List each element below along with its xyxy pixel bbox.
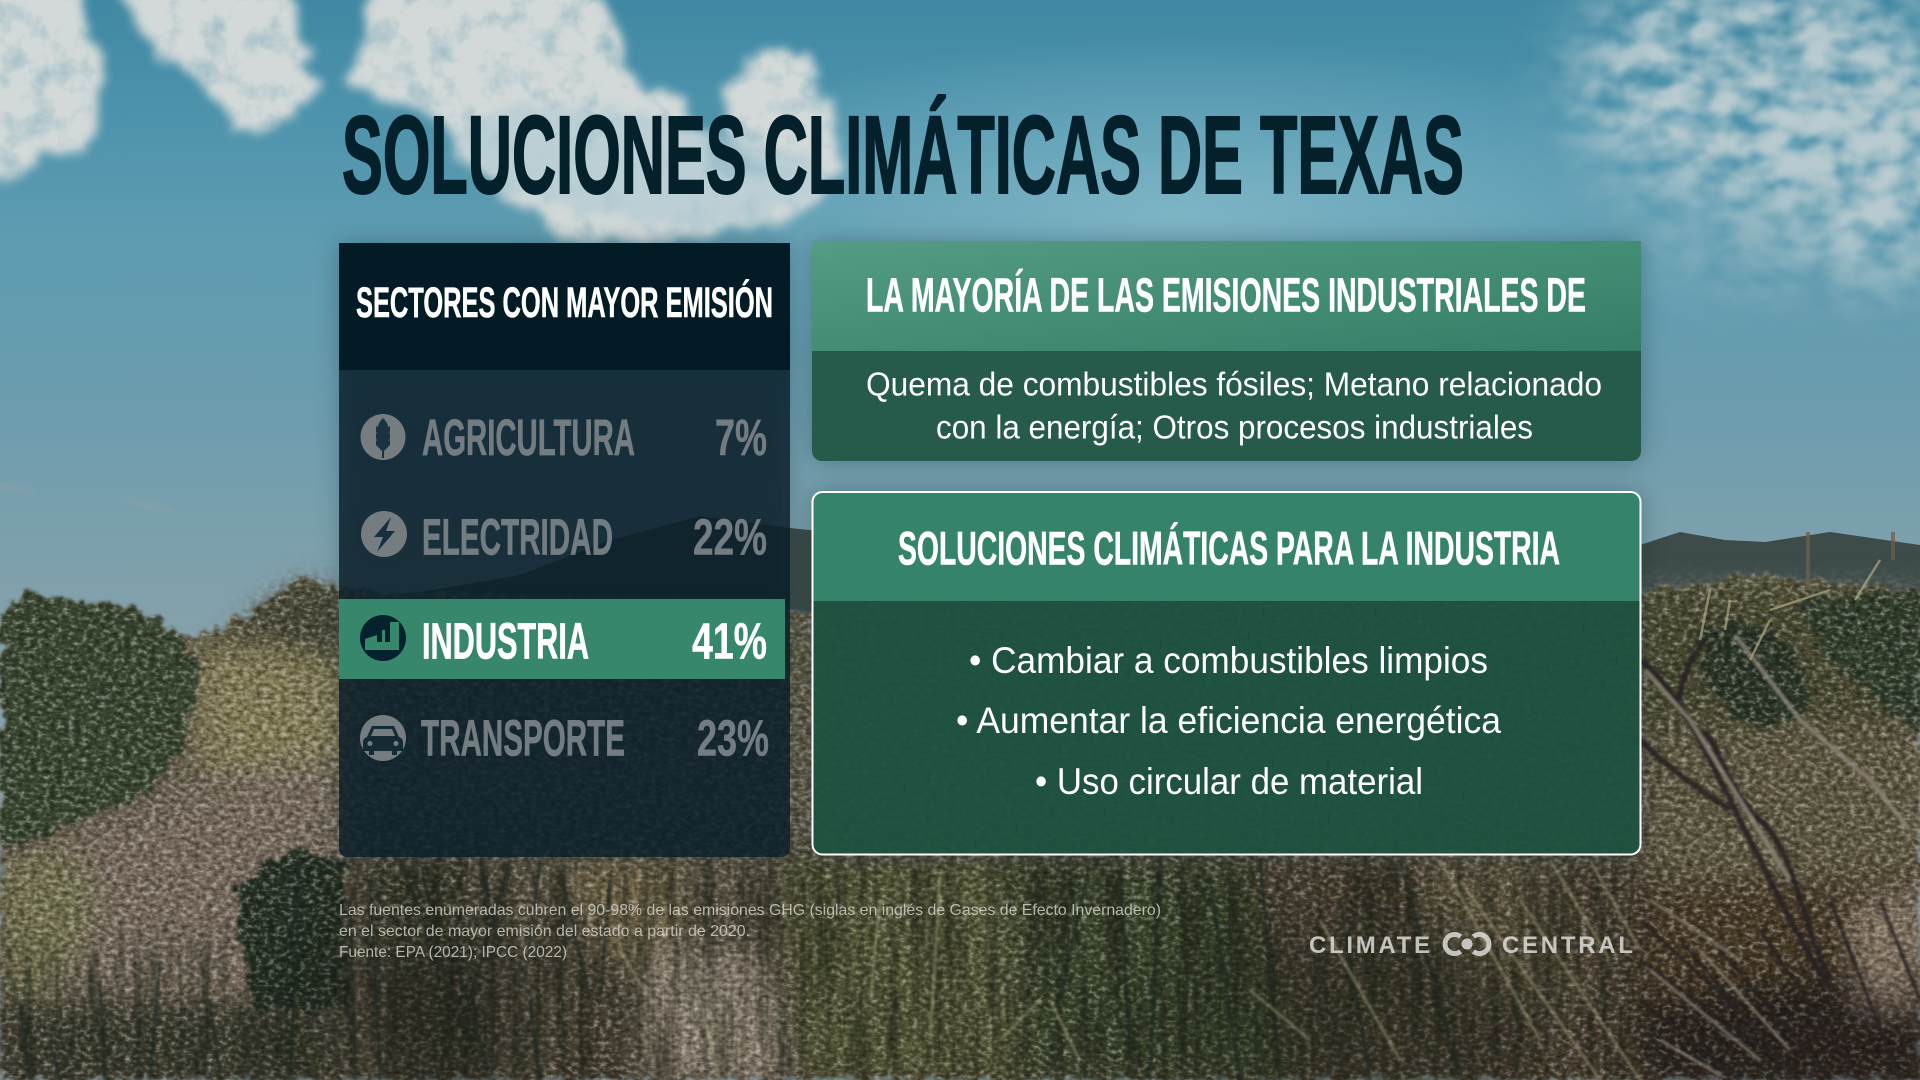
- panel background: [812, 491, 1641, 855]
- icon: lightning bolt: [361, 511, 407, 557]
- row: agricultura: [360, 409, 767, 466]
- emissions sources text: con la energía; Otros procesos industriales: [936, 408, 1533, 446]
- panel: climate solutions for industry: [812, 491, 1641, 855]
- row: electricidad: [361, 508, 767, 566]
- solutions list: • Uso circular de material: [1035, 761, 1423, 802]
- solutions list: [956, 640, 1501, 802]
- value: 7%: 7%: [715, 409, 767, 466]
- logo: Climate Central: [1309, 932, 1633, 959]
- source footnote: Las fuentes enumeradas cubren el 90-98% de las emisiones GHG (siglas en inglés de Gases de Efecto Invernadero): [339, 902, 1161, 919]
- value: 22%: 22%: [693, 508, 767, 566]
- label: electridad: ELECTRIDAD: [422, 508, 613, 566]
- icon: wheat: [360, 414, 406, 460]
- panel border: [812, 492, 1640, 854]
- logo: Climate Central: CLIMATE: [1309, 932, 1430, 959]
- label: agricultura: AGRICULTURA: [422, 409, 635, 466]
- panel: sources of industrial emissions: [812, 241, 1641, 461]
- row: transporte: [360, 710, 769, 766]
- logo: Climate Central: CENTRAL: [1502, 932, 1633, 959]
- source footnote: [339, 902, 1161, 961]
- logo mark: interlocking rings: [1445, 934, 1489, 954]
- icon: factory: [360, 615, 406, 661]
- value: 41%: 41%: [692, 612, 767, 670]
- icon: car: [360, 715, 406, 761]
- emissions sources text: [866, 366, 1602, 446]
- sector panel heading: SECTORES CON MAYOR EMISIÓN: [356, 278, 773, 327]
- panel background: [339, 243, 790, 857]
- row: industria highlighted: [339, 599, 785, 679]
- source footnote: Fuente: EPA (2021); IPCC (2022): [339, 944, 567, 961]
- panel: highest-emitting sectors: [339, 243, 790, 857]
- panel background: [812, 241, 1641, 461]
- label: transporte: TRANSPORTE: [421, 710, 625, 766]
- emissions sources text: Quema de combustibles fósiles; Metano relacionado: [866, 366, 1602, 402]
- source footnote: en el sector de mayor emisión del estado a partir de 2020.: [339, 923, 750, 940]
- label: industria: INDUSTRIA: [422, 612, 589, 670]
- solutions list: • Aumentar la eficiencia energética: [956, 700, 1501, 741]
- highlight band: [339, 599, 785, 679]
- value: 23%: 23%: [697, 710, 769, 766]
- solutions list: • Cambiar a combustibles limpios: [969, 640, 1488, 681]
